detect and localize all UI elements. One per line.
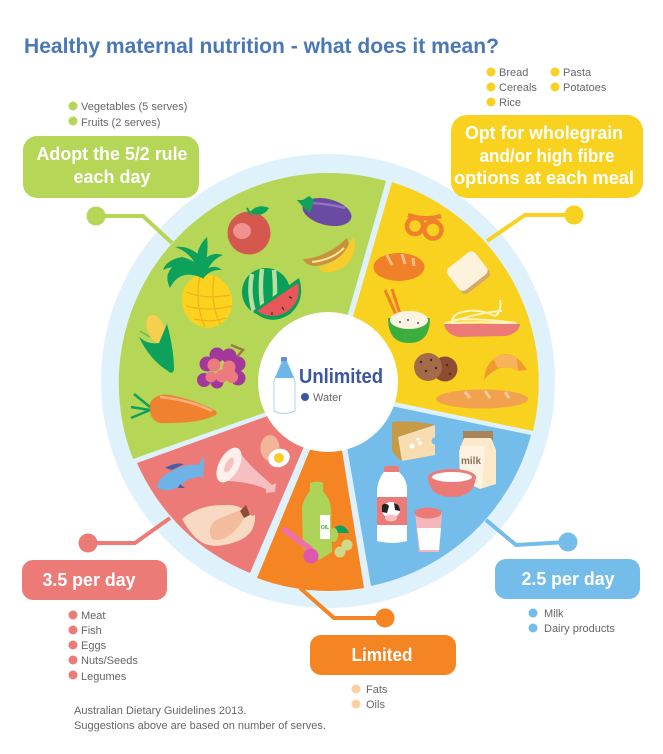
- icon: spoon: [285, 530, 318, 564]
- legend: grains: Pasta: [563, 67, 592, 79]
- icon: rice bowl: [385, 289, 430, 343]
- legend: grains: Potatoes: [563, 82, 607, 94]
- legend: dairy: [528, 608, 615, 635]
- legend: protein: [68, 610, 138, 683]
- footer note: Suggestions above are based on number of serves.: [74, 720, 326, 732]
- legend: water: Water: [313, 392, 342, 404]
- icon: eggplant: [297, 193, 354, 231]
- icon: fish: [157, 457, 204, 490]
- icon: milk bottle: [377, 466, 407, 543]
- wedge: fats and oils: [257, 394, 364, 591]
- icon: pineapple: [163, 237, 239, 334]
- icon: milk carton: milk: [461, 456, 481, 467]
- wedge: grains: [332, 182, 539, 431]
- callout: yellow: and/or high fibre: [480, 146, 614, 166]
- legend: protein: Fish: [81, 625, 102, 637]
- connector: blue: [486, 520, 578, 552]
- footer note: Australian Dietary Guidelines 2013.: [74, 705, 246, 717]
- legend: grains: [486, 67, 607, 109]
- wedge: dairy: [338, 395, 531, 586]
- legend: grains: Cereals: [499, 82, 537, 94]
- connector: pink: [78, 518, 170, 552]
- icon: watermelon: [242, 268, 301, 320]
- icon: bowl: [428, 469, 476, 497]
- icon: apple: [228, 206, 270, 254]
- icon: water bottle: [274, 357, 295, 414]
- callout: yellow: [451, 115, 643, 198]
- legend: vegetables and fruits: [68, 101, 187, 129]
- legend: grains: Rice: [499, 97, 521, 109]
- icon: noodle plate: [444, 300, 520, 337]
- footer note: [74, 705, 326, 732]
- legend: fats and oils: [352, 684, 388, 711]
- wedge: protein: [137, 395, 326, 573]
- icon: ham: [211, 444, 276, 493]
- callout: yellow: Opt for wholegrain: [465, 123, 623, 143]
- callout: yellow: options at each meal: [454, 168, 634, 188]
- icon: pretzel: [407, 215, 442, 238]
- icon: baguette: [436, 390, 528, 408]
- icon: bread loaf: [374, 253, 424, 281]
- legend: protein: Legumes: [81, 671, 127, 683]
- center circle: [258, 312, 398, 452]
- callout: orange: Limited: [352, 645, 412, 665]
- legend: fats and oils: Fats: [366, 684, 388, 696]
- connector: orange: [300, 588, 394, 628]
- title: Healthy maternal nutrition - what does it mean?: [24, 34, 499, 58]
- legend: vegetables and fruits: Vegetables (5 serves): [81, 101, 187, 113]
- icon: cheese: [392, 421, 438, 461]
- icon: banana: [303, 238, 355, 272]
- legend: protein: Nuts/Seeds: [81, 655, 138, 667]
- legend: protein: Eggs: [81, 640, 107, 652]
- legend: vegetables and fruits: Fruits (2 serves): [81, 117, 160, 129]
- legend: dairy: Milk: [544, 608, 564, 620]
- icon: croissant: [484, 354, 527, 380]
- callout: green: Adopt the 5/2 rule: [36, 144, 188, 164]
- callout: pink: [22, 560, 167, 600]
- icon: eggs: [260, 435, 292, 470]
- icon: toast: [445, 249, 492, 296]
- connector: green: [86, 206, 172, 243]
- icon: grapes: [197, 345, 246, 388]
- icon: milk carton: [459, 431, 496, 489]
- icon: chicken: [182, 505, 255, 546]
- callout: orange: [310, 635, 456, 675]
- callout: pink: 3.5 per day: [42, 570, 136, 590]
- wedge: vegetables and fruits: [119, 173, 386, 459]
- legend: fats and oils: Oils: [366, 699, 385, 711]
- callout: green: each day: [74, 167, 150, 187]
- icon: corn: [139, 312, 174, 373]
- callout: blue: 2.5 per day: [522, 569, 614, 589]
- icon: oil bottle: OIL: [321, 525, 329, 531]
- icon: olives: [330, 525, 352, 558]
- icon: oil bottle: [302, 482, 332, 560]
- plate ring: [101, 154, 555, 608]
- icon: cookies: [414, 353, 458, 382]
- label: unlimited: Unlimited: [299, 366, 383, 388]
- connector: yellow: [487, 206, 584, 241]
- icon: carrot: [131, 394, 217, 423]
- legend: grains: Bread: [499, 67, 528, 79]
- legend: dairy: Dairy products: [544, 623, 615, 635]
- icon: milk glass: [414, 508, 442, 552]
- callout: green: [23, 136, 199, 198]
- callout: blue: [495, 559, 640, 599]
- legend: protein: Meat: [81, 610, 105, 622]
